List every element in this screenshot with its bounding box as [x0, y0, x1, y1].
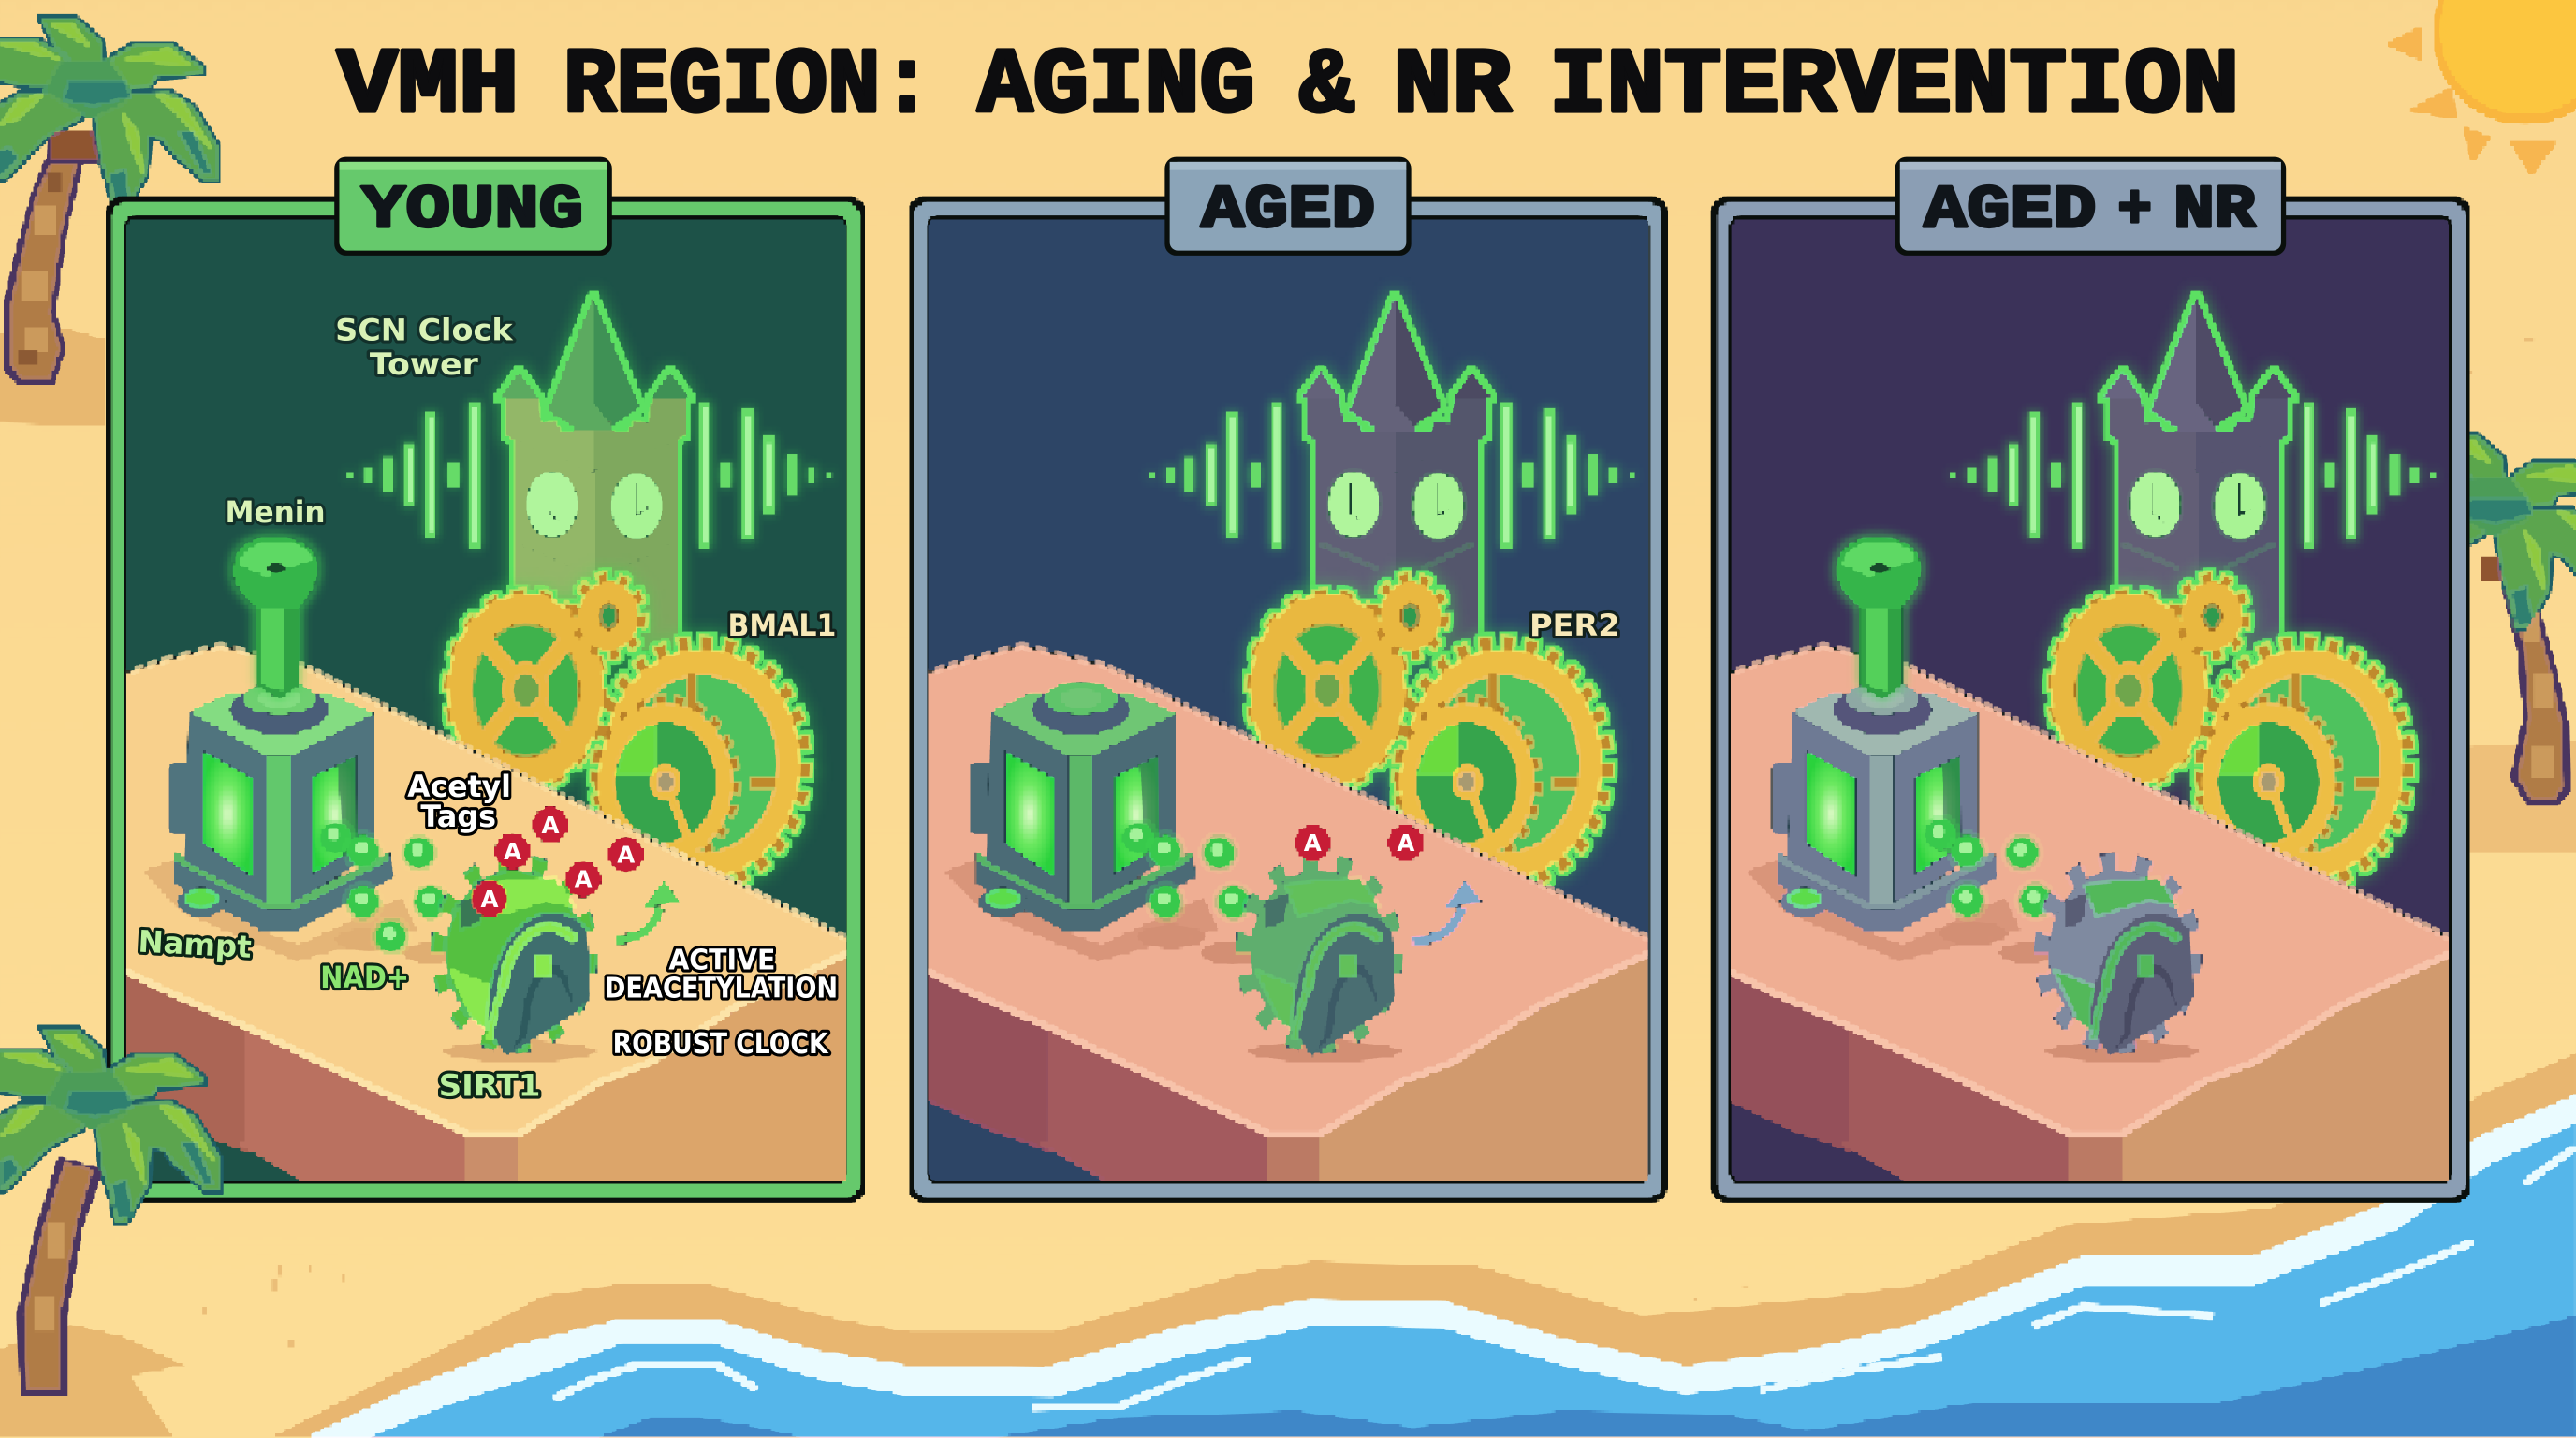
acetyl tag letters: A: [504, 838, 521, 865]
acetyl tag letters: [481, 812, 635, 913]
acetyl tag letters: A: [617, 841, 635, 868]
acetyl tag letters: [1304, 829, 1414, 857]
header tag: aged plus NR: NR: [2174, 177, 2256, 245]
title: [337, 34, 2239, 139]
label: Nampt: Nampt: [138, 924, 253, 965]
title: REGION:: [564, 34, 933, 139]
title: INTERVENTION: [1549, 34, 2239, 139]
panel: young: [108, 157, 864, 1201]
acetyl tag letters: A: [575, 866, 593, 893]
label: SCN clock tower: Tower: [370, 346, 478, 382]
panel: aged: [910, 157, 1666, 1201]
acetyl tag letters: A: [481, 886, 499, 913]
header tag: aged plus NR: +: [2117, 177, 2152, 245]
label: SCN clock tower: SCN Clock: [335, 312, 514, 347]
label: SIRT1: SIRT1: [439, 1068, 540, 1104]
callout: active deacetylation, robust clock: DEACETYLATION: [605, 972, 838, 1005]
acetyl tag letters: A: [1397, 829, 1414, 857]
callout: active deacetylation, robust clock: [605, 944, 838, 1061]
title: VMH: [337, 34, 520, 139]
label: BMAL1: BMAL1: [728, 608, 836, 643]
icon: palm tree top-left: [0, 17, 218, 385]
acetyl tag letters: A: [541, 812, 560, 839]
header tag: aged: AGED: [1201, 177, 1375, 245]
header tag: aged plus NR: AGED: [1924, 177, 2096, 245]
acetyl tag letters: A: [1304, 829, 1322, 857]
icon: palm tree right: [2383, 434, 2576, 803]
label: Acetyl Tags: [407, 769, 511, 834]
icon: sun: [2389, 0, 2576, 174]
header tag: young: YOUNG: [361, 177, 583, 245]
icon: palm tree bottom-left: [0, 1028, 220, 1395]
header tag: aged plus NR: [1895, 157, 2286, 256]
callout: active deacetylation, robust clock: ROBUST CLOCK: [613, 1028, 829, 1061]
label: NAD+: NAD+: [320, 960, 409, 995]
title: &: [1299, 34, 1354, 139]
title: NR: [1393, 34, 1512, 139]
label: Acetyl Tags: Tags: [420, 799, 496, 834]
label: Acetyl Tags: Acetyl: [407, 769, 511, 804]
label: PER2: PER2: [1530, 608, 1620, 643]
header tag: young: [334, 157, 612, 256]
header tag: aged: [1164, 157, 1412, 256]
label: Menin: Menin: [225, 494, 326, 530]
label: SCN clock tower: [335, 312, 514, 382]
title: AGING: [977, 34, 1255, 139]
panel: aged plus NR: [1713, 157, 2469, 1201]
callout: active deacetylation, robust clock: ACTIVE: [668, 944, 775, 976]
